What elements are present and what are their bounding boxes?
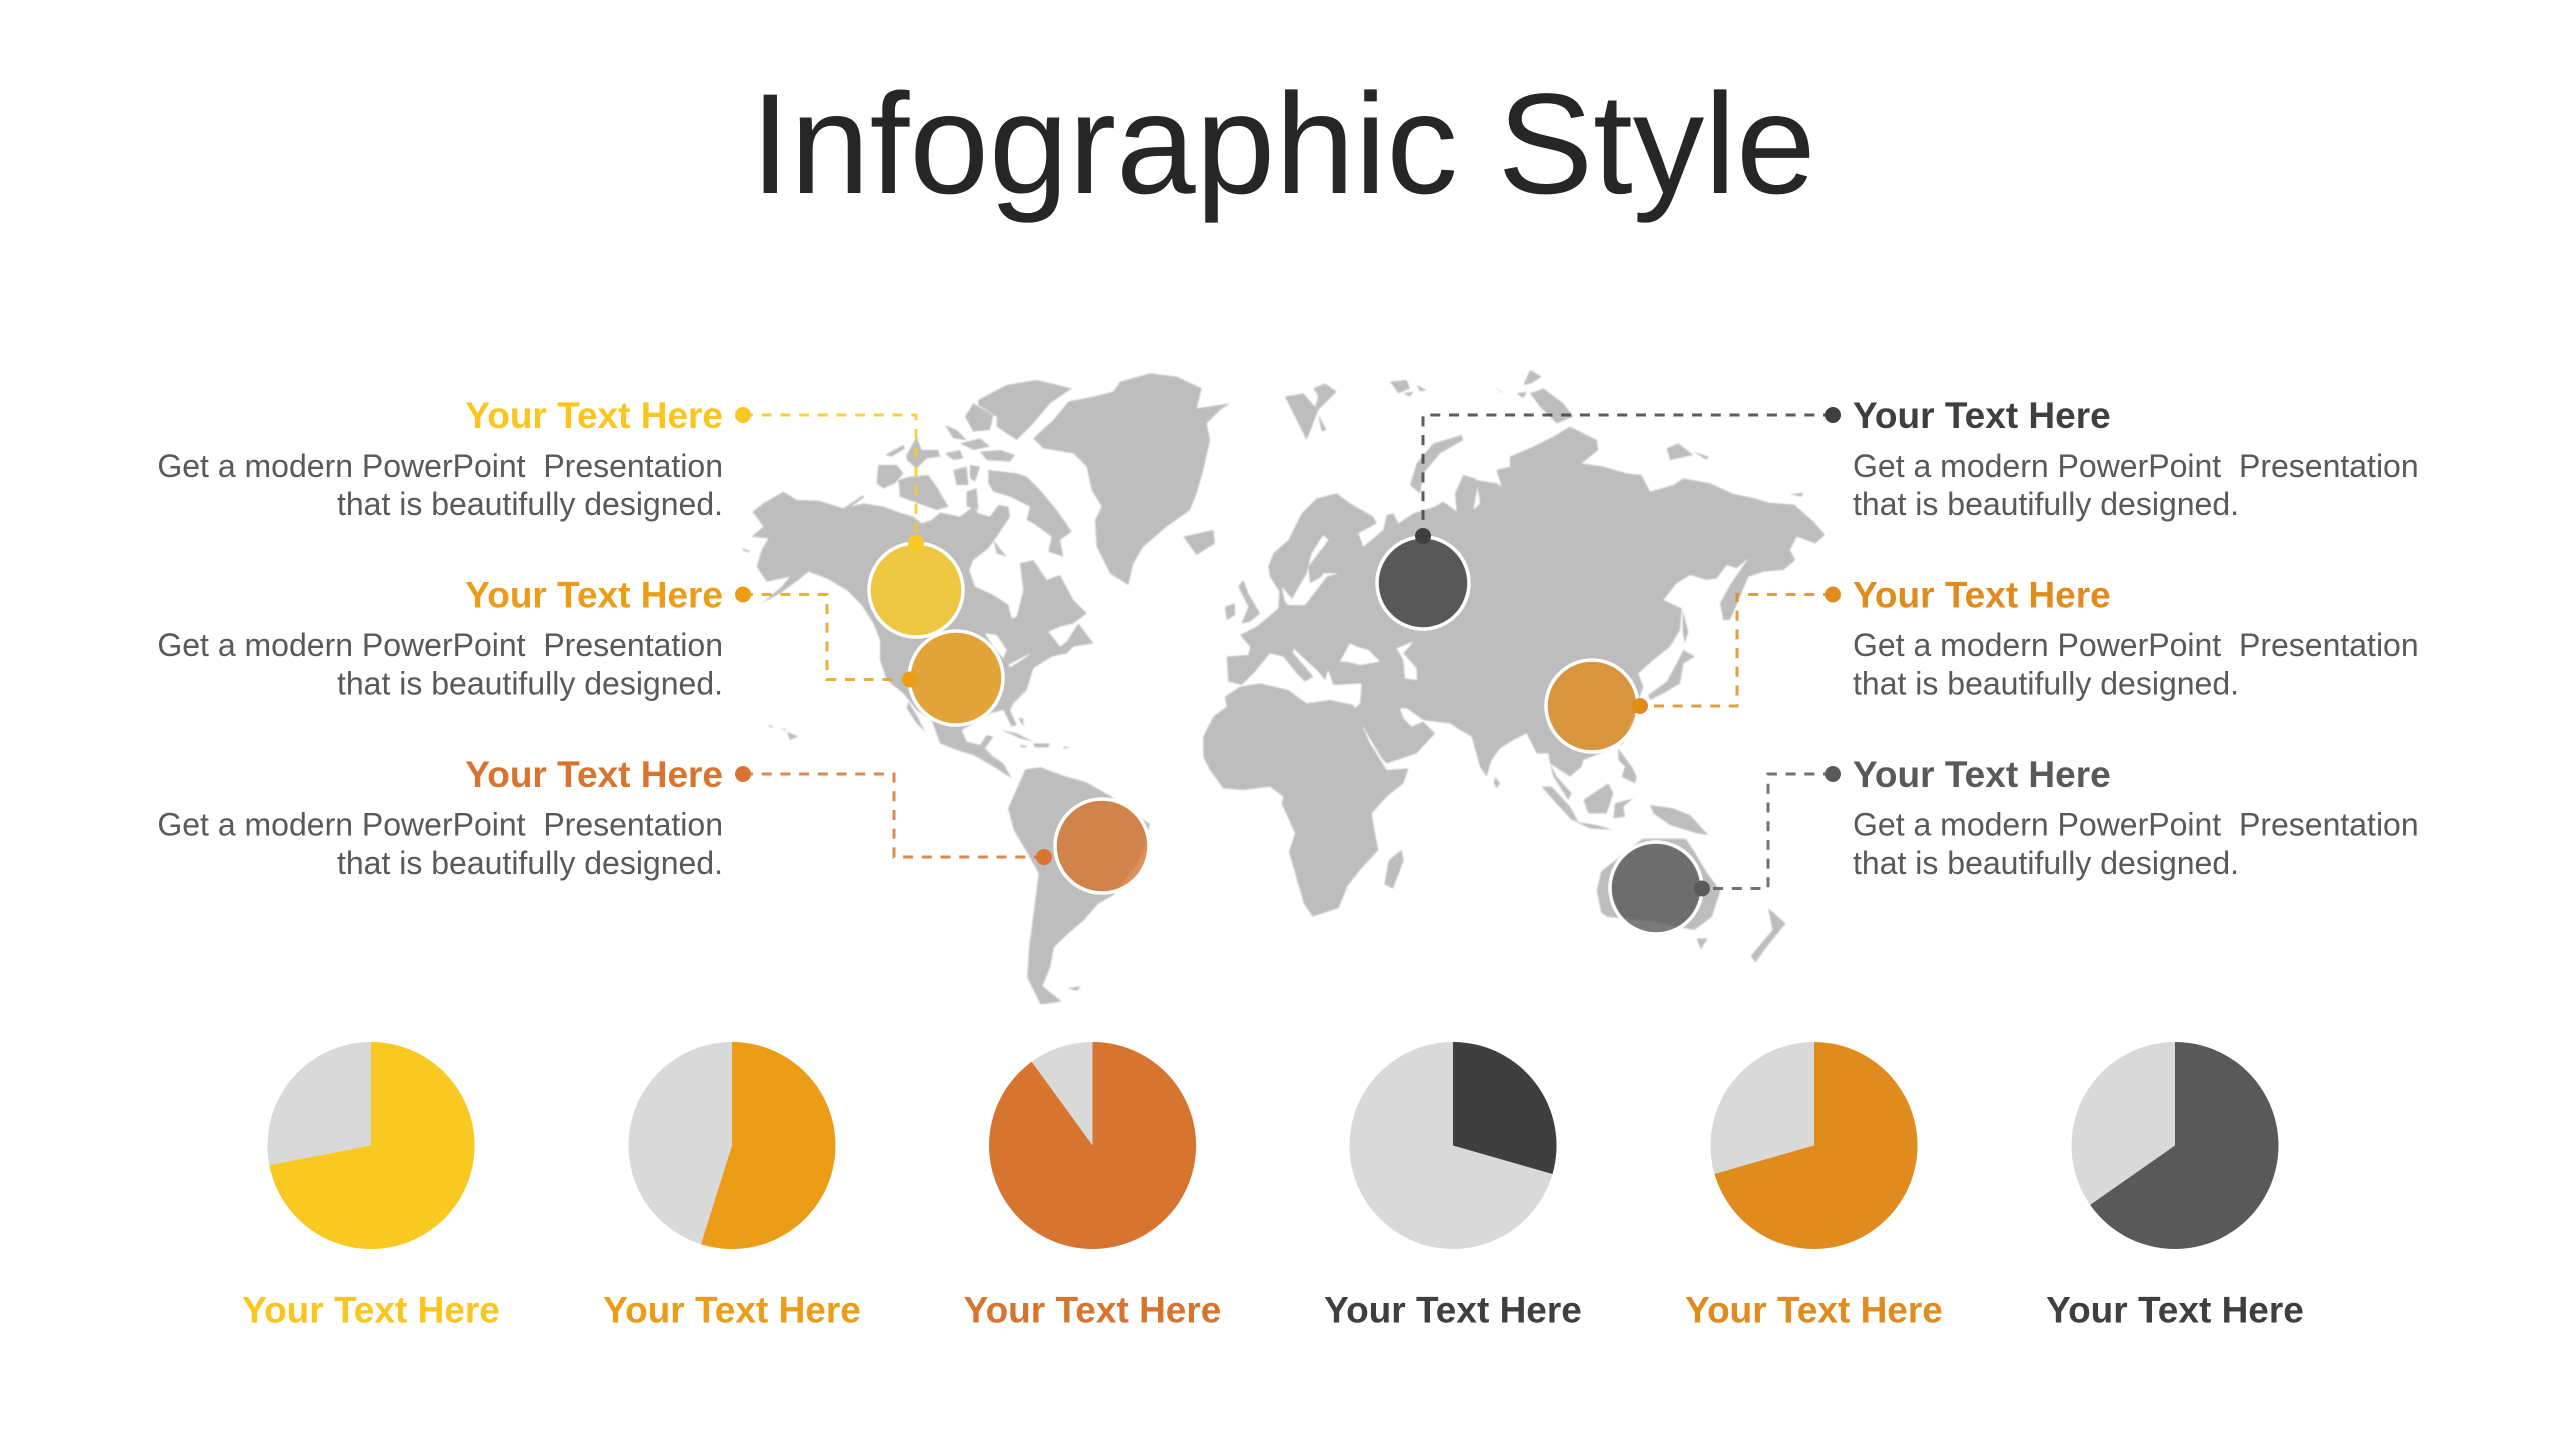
callout: left orange [157, 574, 1003, 725]
pie 3: burnt orange [964, 1042, 1221, 1330]
pie 3: burnt orange: Your Text Here [964, 1290, 1221, 1330]
callout: left yellow [157, 395, 963, 637]
pie 2: orange [603, 1042, 861, 1330]
map: Australia and New Zealand [1597, 839, 1785, 962]
callout: right gray: Get a modern PowerPoint Presentation [1853, 806, 2419, 842]
callout: left orange: Your Text Here [465, 574, 723, 616]
pie 4: dark [1324, 1042, 1582, 1330]
callout: right orange [1546, 574, 2419, 752]
pie 5: amber [1685, 1042, 1943, 1330]
callout: right dark: that is beautifully designed. [1853, 486, 2239, 522]
map: South America [1008, 767, 1150, 1004]
map: North America and Greenland [742, 373, 1230, 778]
pie 4: dark: Your Text Here [1324, 1290, 1582, 1330]
callout: right gray: Your Text Here [1853, 754, 2111, 795]
pie 1: yellow [242, 1042, 500, 1330]
callout: right orange: that is beautifully designed. [1853, 666, 2239, 702]
callout: left burnt orange [157, 754, 1149, 893]
callout: right gray [1610, 754, 2419, 934]
callout: left orange: Get a modern PowerPoint Presentation [157, 627, 723, 663]
world map [742, 370, 1825, 1004]
callout: left yellow: Your Text Here [465, 395, 723, 436]
callout: right dark [1377, 395, 2419, 629]
callout: left yellow: that is beautifully designed. [337, 486, 723, 522]
callout: left burnt orange: Get a modern PowerPoint Presentation [157, 806, 723, 842]
callout: left burnt orange: Your Text Here [465, 754, 723, 795]
map: Eurasia and Africa [1203, 370, 1825, 917]
callout: right dark: Your Text Here [1853, 395, 2111, 436]
pie 6: gray [2046, 1042, 2304, 1330]
callout: right orange: Get a modern PowerPoint Presentation [1853, 627, 2419, 663]
callout: left yellow: Get a modern PowerPoint Presentation [157, 448, 723, 484]
callout: left burnt orange: that is beautifully designed. [337, 845, 723, 881]
callout: left orange: that is beautifully designed. [337, 666, 723, 702]
map: Japan and Southeast Asia [1542, 610, 1708, 835]
pie 1: yellow: Your Text Here [242, 1290, 500, 1330]
callout: right dark: Get a modern PowerPoint Presentation [1853, 448, 2419, 484]
title: Infographic Style [750, 65, 1816, 224]
pie 2: orange: Your Text Here [603, 1290, 861, 1330]
pie 6: gray: Your Text Here [2046, 1290, 2304, 1330]
callout: right orange: Your Text Here [1853, 574, 2111, 616]
callout: right gray: that is beautifully designed. [1853, 845, 2239, 881]
pie 5: amber: Your Text Here [1685, 1290, 1943, 1330]
